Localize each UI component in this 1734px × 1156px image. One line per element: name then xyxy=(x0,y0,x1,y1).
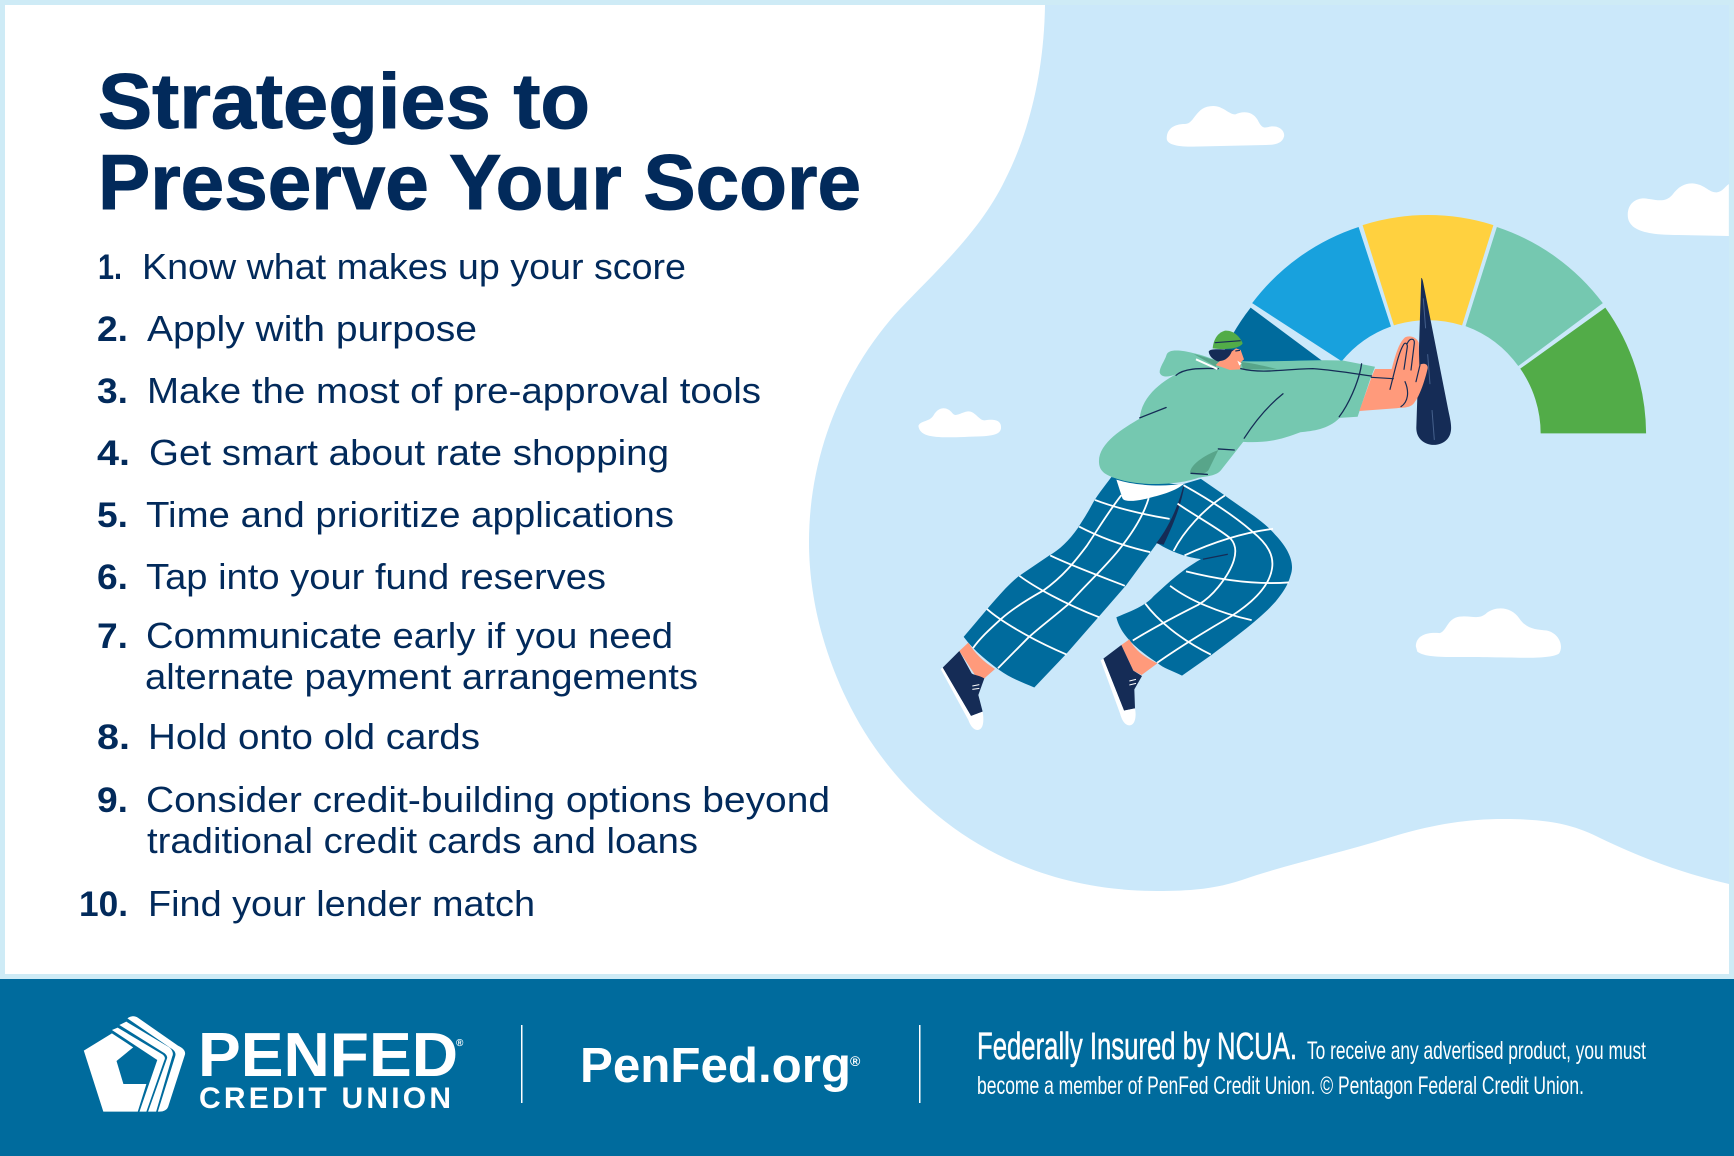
trousers xyxy=(964,477,1292,688)
item 5: 5. xyxy=(97,496,128,535)
PenFed Credit Union wordmark xyxy=(198,1021,464,1115)
item 9 xyxy=(97,779,830,861)
gauge, clouds, hoodie and trousers xyxy=(918,215,1646,688)
item 1: Know what makes up your score xyxy=(142,246,686,287)
PenFed Credit Union wordmark: PENFED xyxy=(198,1021,458,1090)
item 8: Hold onto old cards xyxy=(148,716,480,757)
item 2: 2. xyxy=(97,310,128,349)
left shoe xyxy=(941,643,995,730)
gauge needle xyxy=(1416,278,1451,445)
title: Strategies to xyxy=(98,57,590,145)
item 8: 8. xyxy=(97,718,130,757)
footer bar xyxy=(0,979,1734,1156)
item 4: Get smart about rate shopping xyxy=(149,432,669,473)
item 7: alternate payment arrangements xyxy=(145,656,698,697)
item 4: 4. xyxy=(97,434,130,473)
white shirt hem xyxy=(1116,480,1184,501)
item 10: 10. xyxy=(79,885,128,924)
numbered strategy list xyxy=(79,246,830,924)
item 9: Consider credit-building options beyond xyxy=(146,779,830,820)
title: Preserve Your Score xyxy=(98,138,861,226)
website: PenFed.org xyxy=(580,1039,851,1093)
item 2: Apply with purpose xyxy=(147,308,477,349)
hoodie xyxy=(1099,351,1375,484)
item 6: 6. xyxy=(97,558,128,597)
divider xyxy=(521,1025,522,1103)
right shoe xyxy=(1101,639,1157,725)
gauge arc xyxy=(1218,215,1646,433)
PenFed logo icon xyxy=(84,1016,185,1112)
head and hand xyxy=(1196,331,1428,411)
item 7: 7. xyxy=(97,617,128,656)
illustration: gauge and person xyxy=(918,215,1646,730)
hand pushing needle xyxy=(1359,336,1428,411)
light blue blob xyxy=(809,5,1729,891)
item 6: Tap into your fund reserves xyxy=(146,556,606,597)
PenFed Credit Union wordmark: ® xyxy=(456,1038,464,1049)
item 1: 1. xyxy=(98,248,122,287)
insurance disclaimer: Federally Insured by NCUA. xyxy=(977,1026,1297,1068)
item 3: Make the most of pre-approval tools xyxy=(147,370,761,411)
item 9: 9. xyxy=(97,781,128,820)
item 10: Find your lender match xyxy=(148,883,535,924)
divider xyxy=(919,1025,920,1103)
item 3: 3. xyxy=(97,372,128,411)
item 9: traditional credit cards and loans xyxy=(147,820,698,861)
head with green beanie xyxy=(1196,331,1244,370)
top clouds xyxy=(1167,106,1729,236)
side clouds xyxy=(918,408,1561,658)
item 7: Communicate early if you need xyxy=(146,615,673,656)
website: ® xyxy=(850,1053,861,1069)
feet and shoes xyxy=(941,639,1157,730)
item 7 xyxy=(97,615,698,697)
title xyxy=(98,57,861,226)
PenFed Credit Union wordmark: CREDIT UNION xyxy=(199,1082,451,1115)
insurance disclaimer xyxy=(977,1026,1646,1100)
item 5: Time and prioritize applications xyxy=(146,494,674,535)
